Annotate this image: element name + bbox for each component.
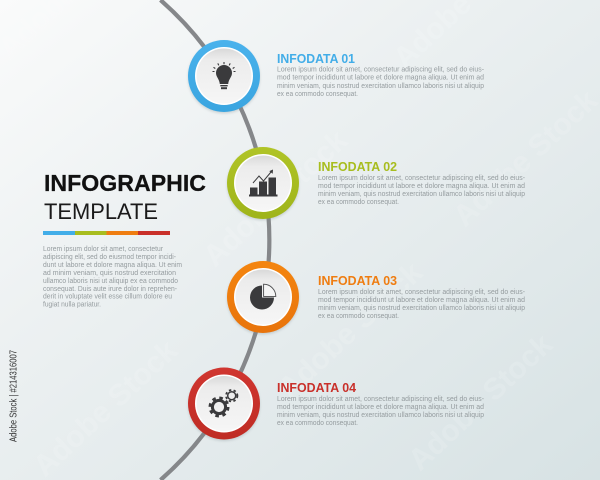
icon: gears [210,390,237,416]
watermarks: Adobe Stock [272,256,429,405]
intro paragraph: adipiscing elit, sed do eiusmod tempor incidi- [43,252,176,261]
intro paragraph: dunt ut labore et dolore magna aliqua. Ut enim [43,260,182,269]
text block 3: Lorem ipsum dolor sit amet, consectetur adipiscing elit, sed do eius- [318,287,525,296]
icon: light bulb [212,62,236,89]
text block 3: INFODATA 03 [318,274,397,288]
text block 2: mod tempor incididunt ut labore et dolore magna aliqua. Ut enim ad [318,181,525,190]
text block 4: mod tempor incididunt ut labore et dolore magna aliqua. Ut enim ad [277,402,484,411]
intro paragraph: fugiat nulla pariatur. [43,300,101,308]
text block 1: ex ea commodo consequat. [277,89,358,98]
icon: bar chart [249,170,278,196]
text block 2: Lorem ipsum dolor sit amet, consectetur adipiscing elit, sed do eius- [318,173,525,182]
text block 1: INFODATA 01 [277,52,355,66]
node 2: green ring with chart [227,147,299,220]
text block 4 [277,381,484,427]
text block 2: INFODATA 02 [318,160,397,174]
text block 3 [318,274,525,320]
text block 4: INFODATA 04 [277,381,356,395]
intro paragraph: derit in voluptate velit esse cillum dolore eu [43,292,172,301]
watermarks: Adobe Stock [402,328,559,477]
watermarks: Adobe Stock [197,124,354,273]
node 3: orange ring with pie [227,261,299,334]
intro paragraph: Lorem ipsum dolor sit amet, consectetur [43,244,163,253]
curved timeline [160,0,269,480]
intro paragraph [43,244,182,308]
title [44,170,206,224]
watermarks: Adobe Stock [27,334,184,480]
intro paragraph: ad minim veniam, quis nostrud exercitation [43,268,176,277]
text block 1: Lorem ipsum dolor sit amet, consectetur adipiscing elit, sed do eius- [277,64,484,74]
text block 1 [277,52,484,98]
node 1: blue ring with bulb [188,40,260,114]
colour bar [43,231,170,235]
title: INFOGRAPHIC [44,170,206,196]
text block 1: minim veniam, quis nostrud exercitation ullamco laboris nisi ut aliquip [277,81,484,90]
text block 3: ex ea commodo consequat. [318,311,399,320]
stock id: Adobe Stock | #214316007 [8,350,20,442]
text block 2: ex ea commodo consequat. [318,197,399,206]
text block 3: minim veniam, quis nostrud exercitation ullamco laboris nisi ut aliquip [318,303,525,312]
text block 4: minim veniam, quis nostrud exercitation ullamco laboris nisi ut aliquip [277,410,484,419]
icon: pie chart [250,284,276,310]
title: TEMPLATE [44,199,158,224]
text block 3: mod tempor incididunt ut labore et dolore magna aliqua. Ut enim ad [318,295,525,304]
intro paragraph: consequat. Duis aute irure dolor in reprehen- [43,284,177,293]
node 4: red ring with gears [188,368,260,441]
intro paragraph: ullamco laboris nisi ut aliquip ex ea commodo [43,276,178,285]
text block 4: ex ea commodo consequat. [277,418,358,427]
text block 2: minim veniam, quis nostrud exercitation ullamco laboris nisi ut aliquip [318,189,525,198]
watermarks: Adobe Stock [447,84,600,233]
text block 1: mod tempor incididunt ut labore et dolore magna aliqua. Ut enim ad [277,72,484,82]
text block 4: Lorem ipsum dolor sit amet, consectetur adipiscing elit, sed do eius- [277,394,484,403]
text block 2 [318,160,525,206]
